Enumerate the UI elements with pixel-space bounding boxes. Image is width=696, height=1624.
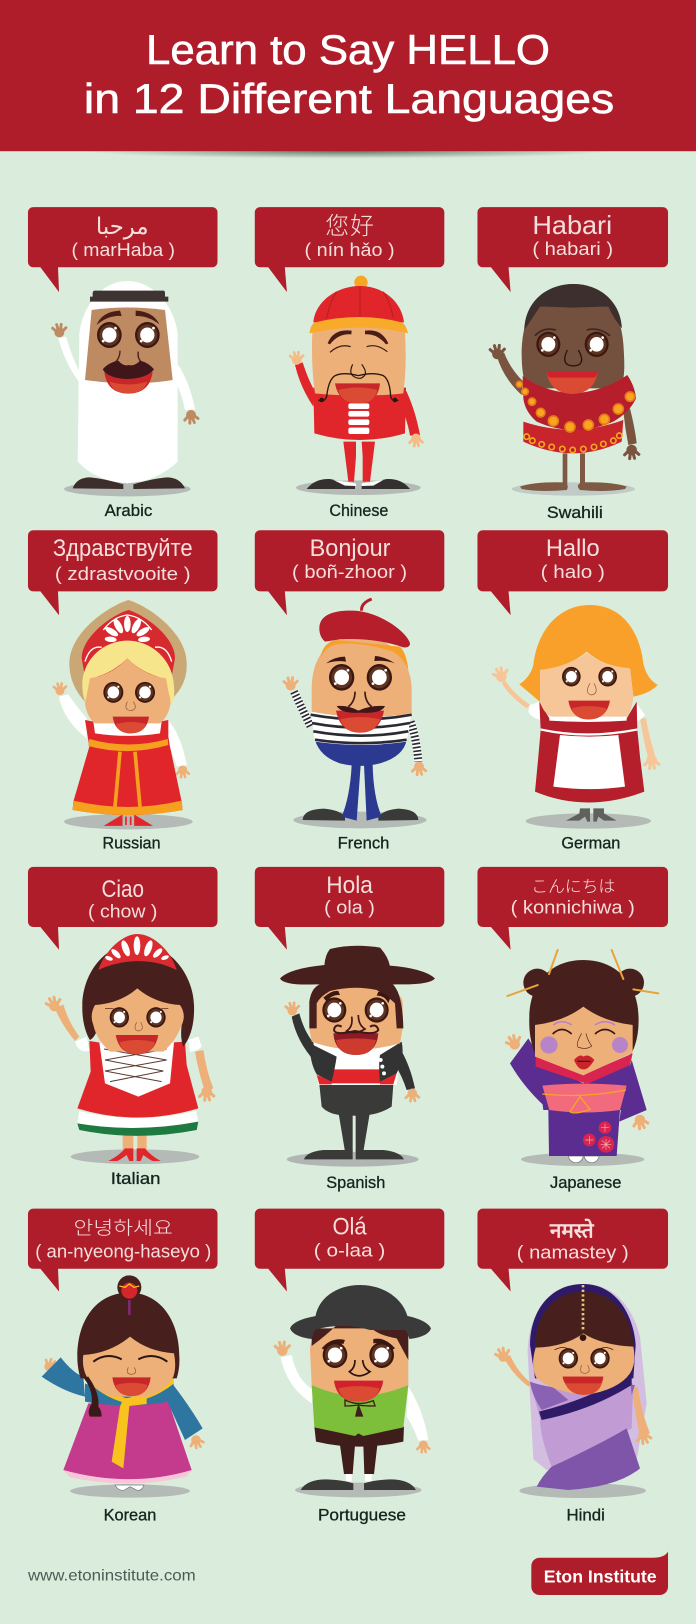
- speech bubble: Spanish greeting: [255, 867, 444, 950]
- character: Chinese man: [290, 276, 423, 495]
- speech bubble: Japanese greeting: こんにちは: [531, 873, 615, 897]
- speech bubble: Korean greeting: [28, 1209, 218, 1292]
- character: Spanish man: [280, 946, 435, 1167]
- speech bubble: Spanish greeting: ( ola ): [324, 897, 375, 918]
- speech bubble: French greeting: Bonjour: [310, 535, 391, 562]
- speech bubble: Korean greeting: 안녕하세요: [74, 1214, 173, 1241]
- speech bubble: Hindi greeting: नमस्ते: [549, 1219, 595, 1243]
- language label: Swahili: [547, 503, 603, 522]
- speech bubble: German greeting: ( halo ): [541, 561, 605, 582]
- character: German woman: [492, 605, 659, 829]
- speech bubble: Chinese greeting: ( nín hǎo ): [304, 239, 395, 260]
- panel: Korean: [28, 1209, 218, 1524]
- speech bubble: Portuguese greeting: ( o-laa ): [314, 1239, 385, 1260]
- language label: Spanish: [326, 1173, 385, 1192]
- language label: Portuguese: [318, 1505, 406, 1524]
- speech bubble: Russian greeting: ( zdrastvooite ): [55, 563, 191, 584]
- speech bubble: Arabic greeting: ( marHaba ): [71, 239, 175, 260]
- language label: French: [338, 833, 389, 852]
- speech bubble: Arabic greeting: مرحبا: [96, 214, 149, 240]
- character: Arabic man: [53, 281, 198, 496]
- speech bubble: Japanese greeting: [477, 867, 668, 950]
- language label: German: [561, 833, 620, 852]
- character: Japanese woman: [505, 950, 658, 1166]
- speech bubble: Swahili greeting: ( habari ): [532, 238, 613, 259]
- panel: Russian: [28, 530, 218, 852]
- language label: Arabic: [105, 501, 152, 520]
- title: [84, 27, 614, 122]
- panel: German: [477, 530, 668, 852]
- panel: Spanish: [255, 867, 444, 1192]
- speech bubble: Hindi greeting: [477, 1209, 668, 1292]
- language label: Chinese: [329, 501, 388, 520]
- panel: Japanese: [477, 867, 668, 1192]
- logo: Eton Institute: Eton Institute: [544, 1567, 657, 1587]
- panel: Portuguese: [255, 1209, 444, 1524]
- speech bubble: German greeting: Hallo: [546, 535, 600, 562]
- speech bubble: Swahili greeting: Habari: [532, 212, 612, 240]
- panel: Hindi: [477, 1209, 668, 1524]
- logo: Eton Institute: [531, 1552, 668, 1595]
- speech bubble: Swahili greeting: [477, 207, 668, 292]
- character: French man: [284, 599, 427, 828]
- speech bubble: Arabic greeting: [28, 207, 218, 292]
- character: Portuguese man: [275, 1285, 431, 1497]
- speech bubble: Spanish greeting: Hola: [326, 872, 374, 899]
- panel: Italian: [28, 867, 218, 1188]
- website address: www.etoninstitute.com: [27, 1568, 196, 1585]
- speech bubble: French greeting: ( boñ-zhoor ): [292, 561, 407, 582]
- speech bubble: French greeting: [255, 530, 444, 615]
- panel: Chinese: [255, 206, 444, 520]
- speech bubble: German greeting: [477, 530, 668, 615]
- character: Italian woman: [45, 934, 214, 1164]
- speech bubble: Portuguese greeting: Olá: [332, 1214, 367, 1241]
- speech bubble: Japanese greeting: ( konnichiwa ): [511, 897, 635, 918]
- character: Korean woman: [41, 1270, 204, 1498]
- speech bubble: Chinese greeting: 您好: [325, 206, 374, 241]
- title: Learn to Say HELLO: [146, 27, 550, 73]
- speech bubble: Russian greeting: Здравствуйте: [53, 535, 193, 562]
- language label: Russian: [103, 833, 161, 852]
- language label: Japanese: [550, 1173, 621, 1192]
- language label: Italian: [111, 1169, 161, 1188]
- speech bubble: Italian greeting: [28, 867, 218, 950]
- speech bubble: Chinese greeting: [255, 206, 444, 292]
- language label: Hindi: [567, 1505, 605, 1524]
- character: Hindi woman: [494, 1284, 652, 1498]
- panel: French: [255, 530, 444, 852]
- speech bubble: Portuguese greeting: [255, 1209, 444, 1292]
- title: in 12 Different Languages: [84, 76, 614, 122]
- header shadow: [84, 144, 612, 158]
- speech bubble: Italian greeting: Ciao: [102, 876, 144, 903]
- panel: Arabic: [28, 207, 218, 520]
- speech bubble: Hindi greeting: ( namastey ): [517, 1241, 629, 1262]
- speech bubble: Italian greeting: ( chow ): [88, 901, 157, 922]
- character: Russian woman: [54, 600, 193, 829]
- character: Swahili man: [490, 284, 639, 496]
- header banner: [0, 0, 696, 151]
- speech bubble: Russian greeting: [28, 530, 218, 615]
- panel: Swahili: [477, 207, 668, 522]
- language label: Korean: [104, 1505, 156, 1524]
- speech bubble: Korean greeting: ( an-nyeong-haseyo ): [35, 1240, 211, 1261]
